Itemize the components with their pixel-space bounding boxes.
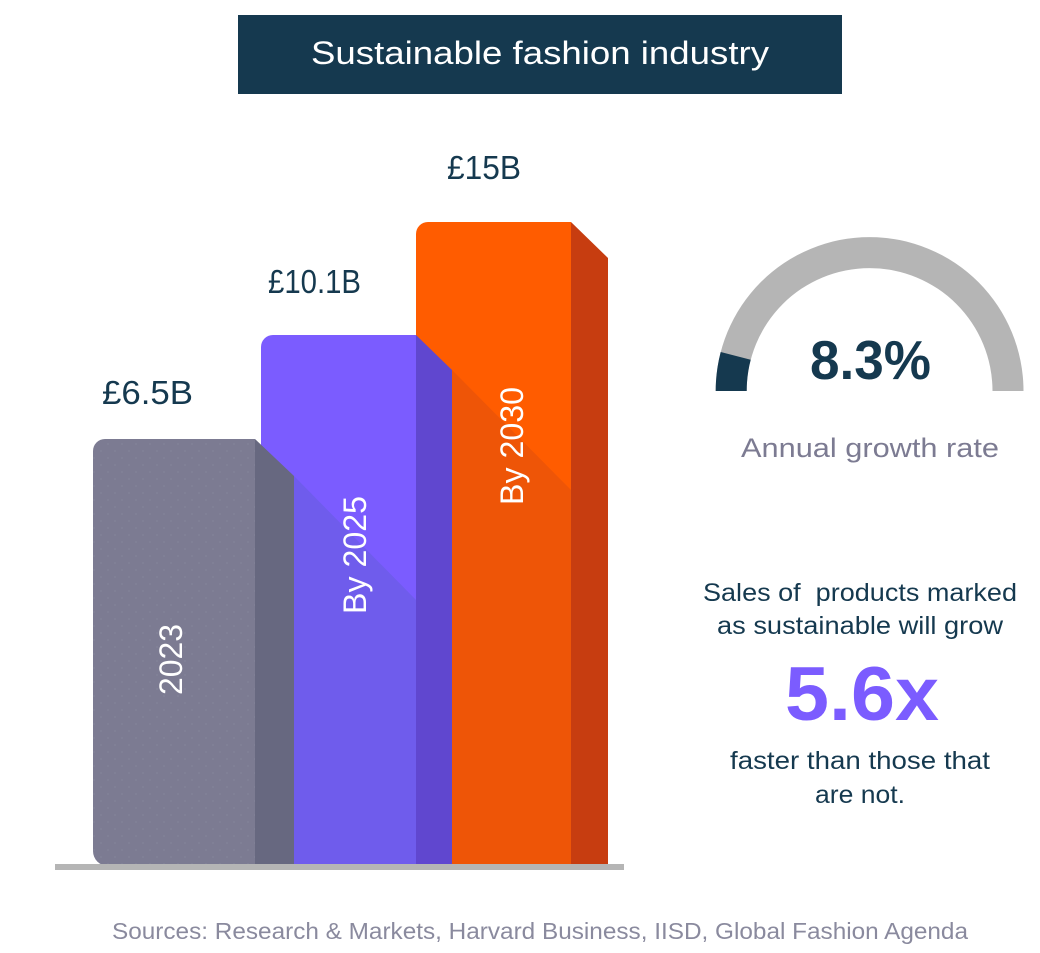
gauge track — [716, 237, 1024, 391]
value label: 6.5B: £6.5B — [102, 374, 193, 411]
gauge: annual growth rate — [716, 237, 1024, 463]
bar: 2023 — [93, 439, 294, 866]
callout closing text: faster than those that — [730, 747, 990, 775]
gauge value segment — [716, 352, 751, 391]
callout closing text: are not. — [815, 781, 905, 809]
callout figure: 5.6x — [785, 652, 939, 737]
bar: By 2030 — [416, 222, 608, 866]
title banner — [238, 15, 842, 94]
bar: 2023: 2023 — [153, 624, 189, 695]
value label: 15B: £15B — [447, 149, 521, 186]
bar: By 2025 — [261, 335, 452, 866]
bar: By 2030: By 2030 — [494, 387, 530, 505]
callout: sustainable sales — [703, 579, 1024, 809]
value label: 10.1B: £10.1B — [268, 263, 361, 300]
bar: By 2025: By 2025 — [337, 496, 373, 614]
callout intro text: Sales of products marked — [703, 579, 1017, 607]
title banner: Sustainable fashion industry — [311, 35, 769, 71]
bar chart — [55, 149, 624, 870]
gauge value: 8.3% — [810, 329, 931, 391]
gauge label: Annual growth rate — [741, 433, 999, 463]
chart baseline — [55, 864, 624, 870]
callout intro text: as sustainable will grow — [717, 612, 1004, 640]
sources: Sources: Research & Markets, Harvard Business, IISD, Global Fashion Agenda — [112, 918, 968, 944]
